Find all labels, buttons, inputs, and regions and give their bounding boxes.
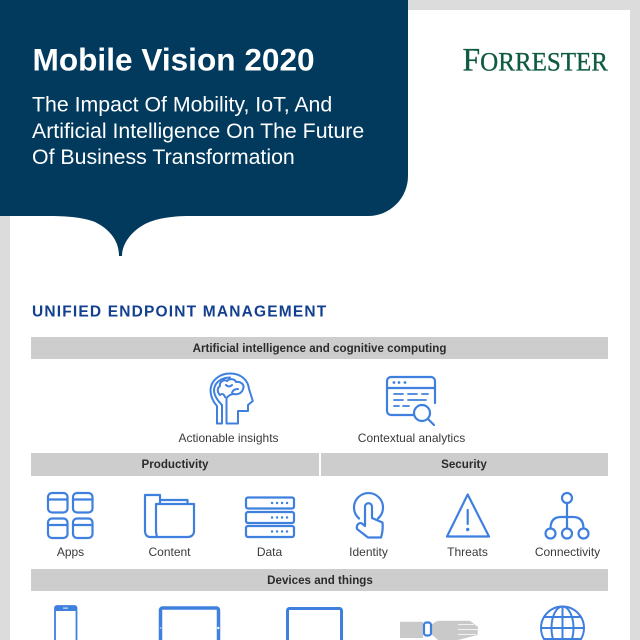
label: apps: Apps bbox=[57, 545, 84, 559]
label: connectivity: Connectivity bbox=[535, 545, 600, 559]
label: contextual analytics: Contextual analytics bbox=[358, 431, 465, 445]
label: threats: Threats bbox=[447, 545, 488, 559]
section heading: UNIFIED ENDPOINT MANAGEMENT bbox=[32, 304, 327, 320]
subtitle: The Impact Of Mobility, IoT, And bbox=[32, 92, 332, 116]
label: actionable insights: Actionable insights bbox=[178, 431, 279, 445]
icon: tablet landscape bbox=[160, 608, 220, 640]
subtitle bbox=[32, 92, 364, 169]
label: identity: Identity bbox=[349, 545, 388, 559]
bar: security: Security bbox=[441, 458, 487, 471]
bar: devices and things bbox=[31, 569, 608, 591]
icon: analytics window bbox=[387, 377, 435, 425]
bar: security bbox=[321, 453, 608, 476]
icon: phone bbox=[55, 606, 76, 640]
bar: productivity bbox=[31, 453, 319, 476]
subtitle: Of Business Transformation bbox=[32, 145, 295, 169]
icon: threats triangle bbox=[447, 494, 489, 536]
icon: content folder bbox=[145, 495, 194, 537]
bar: productivity: Productivity bbox=[142, 458, 209, 471]
icon: connectivity tree bbox=[546, 493, 588, 538]
icon: wrist with watch bbox=[400, 621, 478, 640]
header banner with speech tail bbox=[0, 0, 408, 256]
label: data: Data bbox=[257, 545, 282, 559]
title: Mobile Vision 2020 bbox=[32, 42, 315, 78]
subtitle: Artificial Intelligence On The Future bbox=[32, 119, 364, 143]
bar: devices and things: Devices and things bbox=[267, 574, 373, 587]
logo: Forrester: FORRESTER bbox=[462, 42, 609, 78]
icon: identity touch bbox=[354, 493, 383, 538]
icon: globe bbox=[541, 606, 584, 640]
icon: apps bbox=[48, 493, 92, 538]
bar: artificial intelligence bbox=[31, 337, 608, 359]
bar: artificial intelligence: Artificial intelligence and cognitive computing bbox=[193, 342, 446, 355]
icon: data stack bbox=[246, 498, 294, 537]
icon: brain head bbox=[210, 374, 253, 424]
label: content: Content bbox=[148, 545, 191, 559]
icon: tablet bbox=[288, 608, 342, 640]
